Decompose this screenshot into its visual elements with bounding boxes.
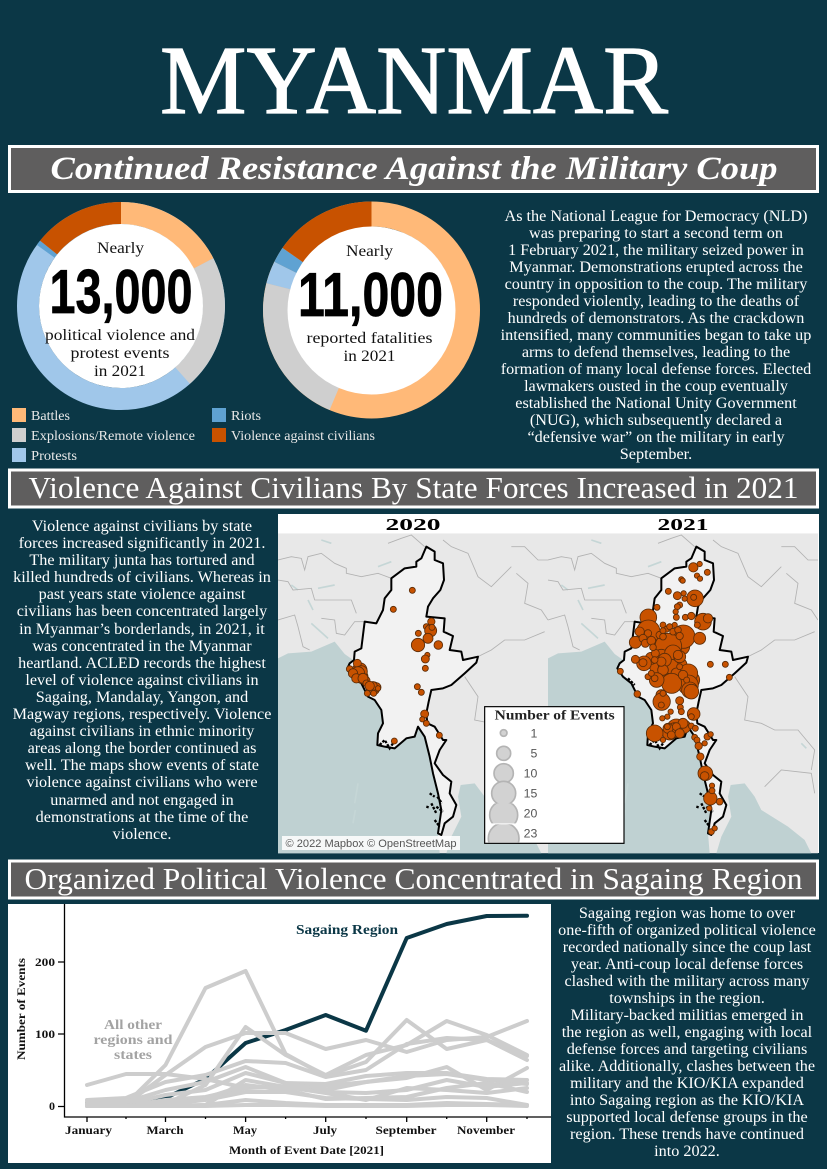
text: coup summary: (NUG), which subsequently declared a <box>530 411 782 429</box>
text: violence against civilians: well. The maps show events of state <box>25 756 259 774</box>
map 2021: 2021 <box>658 515 708 534</box>
legend: number of events: Number of Events <box>495 708 615 723</box>
donut 1 text <box>45 240 195 380</box>
legend: number of events: 20 <box>524 807 537 821</box>
text: violence against civilians: areas along the border continued as <box>28 739 256 757</box>
text: coup summary <box>500 207 812 463</box>
text: violence against civilians: level of violence against civilians in <box>25 671 259 689</box>
text: sagaing region: into 2022. <box>654 1142 720 1160</box>
text: sagaing region: year. Anti-coup local defense forces <box>571 955 803 973</box>
axes <box>58 904 551 1122</box>
text: coup summary: arms to defend themselves, leading to the <box>522 343 790 361</box>
text: violence against civilians: violence against civilians who were <box>26 773 258 791</box>
text: coup summary: lawmakers ousted in the coup eventually <box>524 377 788 395</box>
annotation: all other regions: All other <box>104 1018 162 1033</box>
legend: number of events <box>485 707 624 854</box>
text: coup summary: established the National Unity Government <box>515 394 797 412</box>
donut 2 text: 11,000 <box>298 261 443 330</box>
donut: fatalities by type <box>263 202 468 410</box>
text: violence against civilians: against civilians in ethnic minority <box>30 722 254 740</box>
panel: maps <box>278 514 819 854</box>
text: coup summary: country in opposition to the coup. The military <box>505 275 807 293</box>
text: coup summary: was preparing to start a second term on <box>529 224 783 242</box>
axis labels: 100 <box>35 1027 55 1041</box>
text: coup summary: Myanmar. Demonstrations erupted across the <box>509 258 803 276</box>
text: violence against civilians: killed hundreds of civilians. Whereas in <box>13 568 271 586</box>
donut 1 text: in 2021 <box>94 363 146 380</box>
text: violence against civilians: forces increased significantly in 2021. <box>19 534 265 552</box>
text: sagaing region: into Sagaing region as the KIO/KIA <box>570 1091 804 1109</box>
text: sagaing region: defense forces and targeting civilians <box>567 1040 807 1058</box>
donut 2 text <box>298 243 443 365</box>
text: violence against civilians: civilians has been concentrated largely <box>17 602 267 620</box>
legend: event types: Explosions/Remote violence <box>31 429 195 444</box>
donut 2 text: in 2021 <box>344 348 396 365</box>
text: coup summary: “defensive war” on the military in early <box>527 428 785 446</box>
text: violence against civilians: The military junta has tortured and <box>29 551 255 569</box>
text: coup summary: responded violently, leading to the deaths of <box>513 292 799 310</box>
map attribution: © 2022 Mapbox © OpenStreetMap <box>286 838 456 850</box>
axis labels: Month of Event Date [2021] <box>229 1143 384 1157</box>
annotation: all other regions: regions and <box>94 1033 173 1048</box>
text: sagaing region: the region as well, engaging with local <box>562 1023 812 1041</box>
text: violence against civilians: heartland. ACLED records the highest <box>18 654 266 672</box>
text: violence against civilians: was concentrated in the Myanmar <box>32 637 252 655</box>
banner: violence against civilians: Violence Against Civilians By State Forces Increased in 2021 <box>28 470 798 505</box>
legend: event types: Protests <box>31 449 77 464</box>
legend: event types: Violence against civilians <box>231 429 375 444</box>
legend: number of events: 1 <box>530 726 537 740</box>
text: sagaing region: one-fifth of organized political violence <box>558 921 816 939</box>
other regions lines <box>87 971 527 1106</box>
text: sagaing region: alike. Additionally, clashes between the <box>559 1057 815 1075</box>
legend: number of events: 5 <box>530 747 537 761</box>
text: sagaing region: supported local defense groups in the <box>566 1108 808 1126</box>
text: sagaing region: townships in the region. <box>609 989 765 1007</box>
text: violence against civilians: unarmed and not engaged in <box>50 790 234 808</box>
text: violence against civilians: Magway regions, respectively. Violence <box>13 705 271 723</box>
map 2020: 2020 <box>386 515 440 534</box>
axis labels: January <box>65 1123 112 1137</box>
text: violence against civilians <box>13 517 271 843</box>
text: coup summary: formation of many local defense forces. Elected <box>501 360 811 378</box>
text: violence against civilians: Violence against civilians by state <box>32 517 252 535</box>
axis labels: March <box>146 1123 184 1137</box>
map 2020 <box>278 515 548 853</box>
donut: events by type <box>28 202 225 399</box>
text: sagaing region: region. These trends have continued <box>570 1125 804 1143</box>
annotation: all other regions: states <box>114 1048 153 1063</box>
legend: number of events: 15 <box>524 787 537 801</box>
donut 1 text: Nearly <box>97 240 144 257</box>
line chart <box>8 904 551 1163</box>
donut 2 text: Nearly <box>346 243 393 260</box>
axis labels <box>14 955 516 1157</box>
annotation: all other regions <box>94 1018 173 1063</box>
banner: organized political violence: Organized Political Violence Concentrated in Sagaing Region <box>24 861 803 896</box>
axis labels: 200 <box>35 955 55 969</box>
sagaing line <box>87 916 527 1103</box>
legend: event types <box>12 408 375 464</box>
axis labels: May <box>233 1123 257 1137</box>
text: coup summary: 1 February 2021, the military seized power in <box>508 241 804 259</box>
axis labels: September <box>376 1123 437 1137</box>
text: violence against civilians: violence. <box>113 825 171 843</box>
axis labels: 0 <box>49 1099 55 1113</box>
donut 1 text: political violence and <box>45 327 195 344</box>
legend: number of events: 10 <box>524 767 537 781</box>
text: coup summary: intensified, many communities began to take up <box>501 326 811 344</box>
text: sagaing region: recorded nationally since the coup last <box>563 938 811 956</box>
annotation: sagaing region: Sagaing Region <box>296 923 398 938</box>
text: coup summary: September. <box>620 445 692 463</box>
axis labels: July <box>313 1123 337 1137</box>
donut 2 text: reported fatalities <box>306 330 432 347</box>
text: sagaing region <box>558 904 816 1160</box>
text: coup summary: As the National League for Democracy (NLD) <box>505 207 807 225</box>
text: coup summary: hundreds of demonstrators. As the crackdown <box>508 309 804 327</box>
text: violence against civilians: past years state violence against <box>39 585 245 603</box>
text: violence against civilians: demonstrations at the time of the <box>36 808 248 826</box>
text: sagaing region: military and the KIO/KIA expanded <box>570 1074 804 1092</box>
legend: number of events: 23 <box>524 827 537 841</box>
donut 1 text: 13,000 <box>50 258 192 327</box>
donut 1 text: protest events <box>70 345 170 362</box>
axis labels: November <box>457 1123 516 1137</box>
legend: event types: Riots <box>231 409 261 424</box>
text: sagaing region: clashed with the military across many <box>564 972 810 990</box>
map 2021 <box>548 515 818 853</box>
axis labels: Number of Events <box>14 958 28 1060</box>
legend: event types: Battles <box>31 409 70 424</box>
banner: continued resistance: Continued Resistance Against the Military Coup <box>50 151 777 187</box>
text: violence against civilians: Sagaing, Mandalay, Yangon, and <box>36 688 248 706</box>
title: MYANMAR <box>160 27 669 135</box>
text: sagaing region: Military-backed militias emerged in <box>570 1006 804 1024</box>
banner: continued resistance <box>10 146 818 192</box>
text: sagaing region: Sagaing region was home to over <box>579 904 795 922</box>
text: violence against civilians: in Myanmar’s borderlands, in 2021, it <box>19 620 265 638</box>
